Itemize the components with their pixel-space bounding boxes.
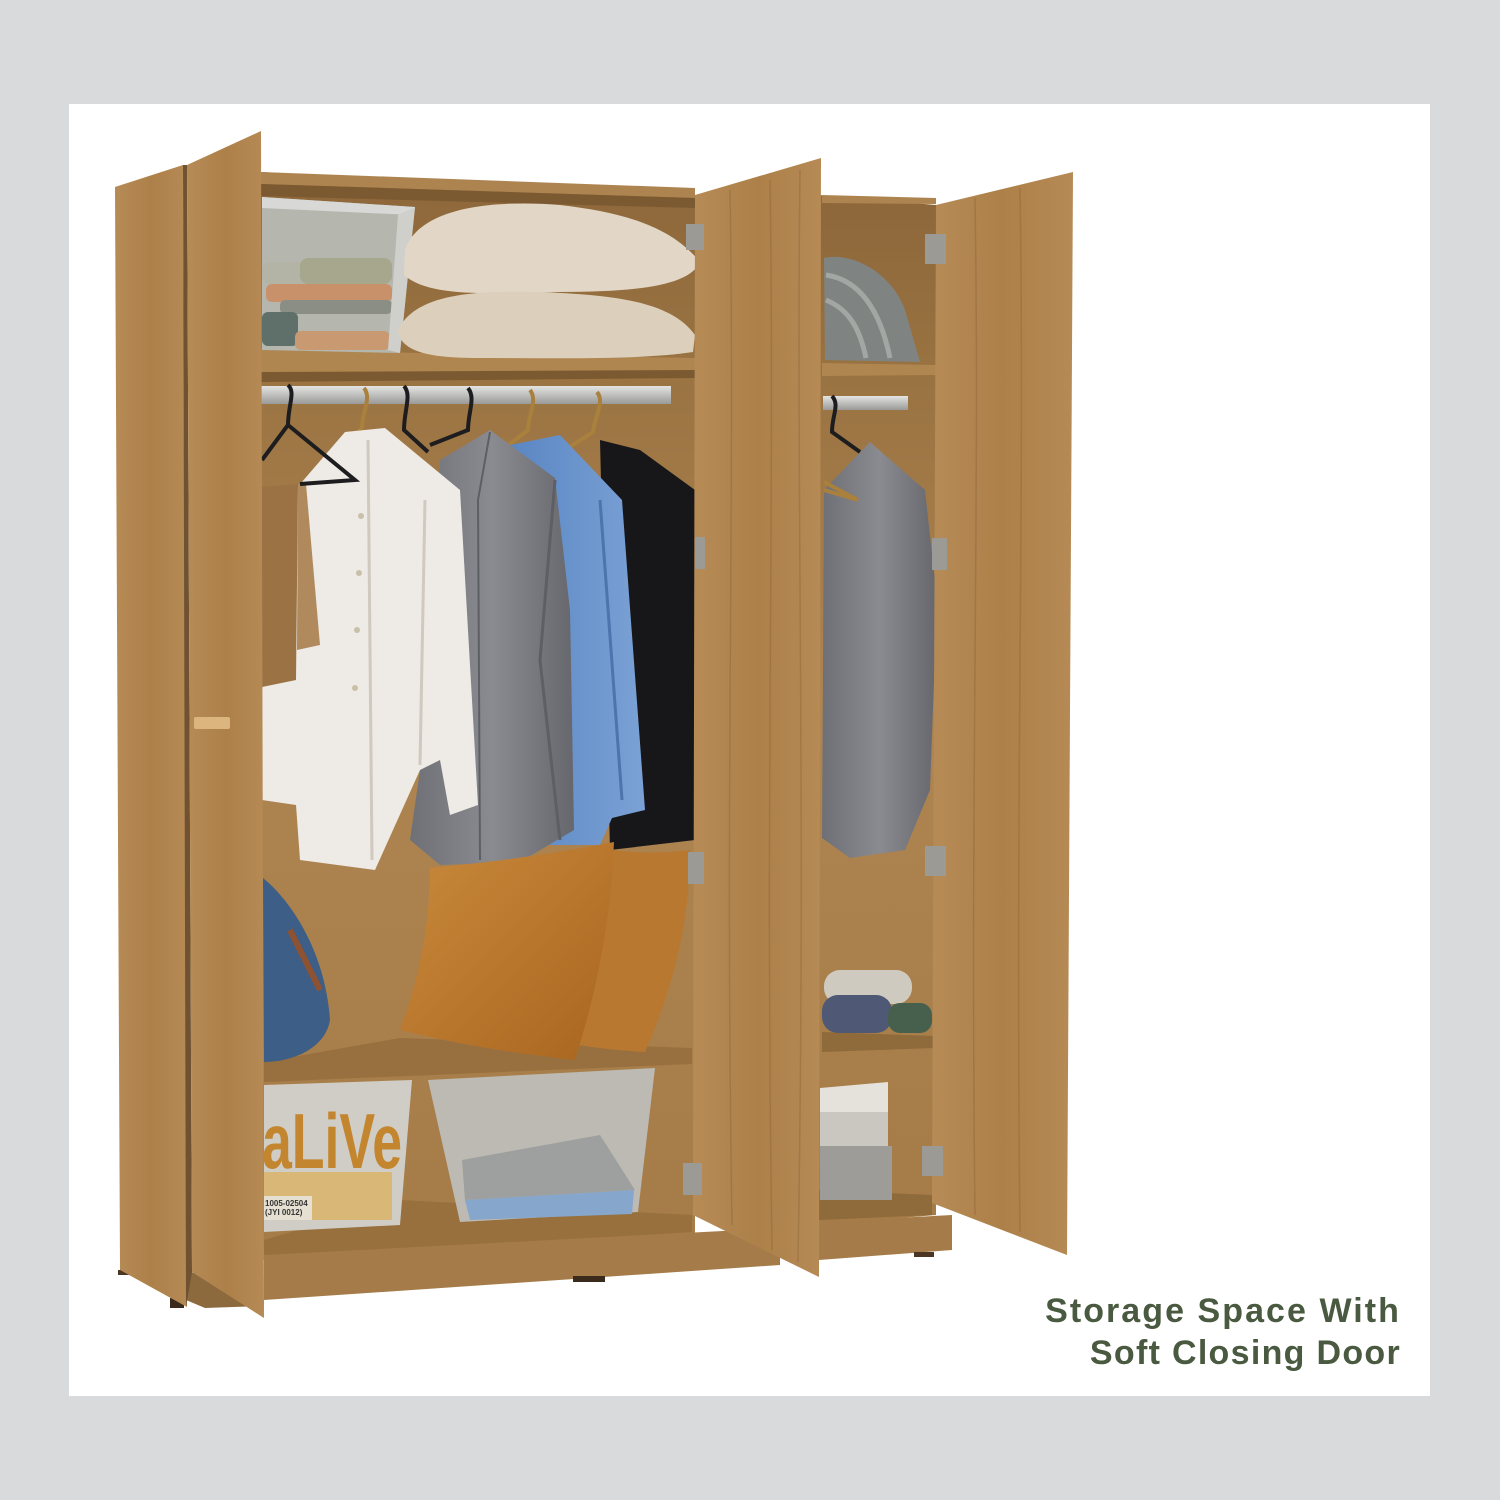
blue shirt [510,435,645,845]
pillows [398,203,700,358]
rail right [823,396,908,410]
stacked boxes [820,1082,892,1200]
lower left box: 1005-02504 [265,1199,308,1208]
caption [1045,1292,1401,1372]
folded clothes [822,970,932,1033]
black shirt [600,440,695,850]
top left storage box [262,197,415,353]
right hanger [824,482,858,500]
lower left box: (JYI 0012) [265,1208,303,1217]
lower left box: aLiVe [262,1097,402,1185]
wardrobe carcass [118,172,952,1308]
backpack [263,878,330,1062]
left door [187,131,264,1318]
white shirt [262,428,478,870]
lower left box [262,1080,412,1232]
left side panel [115,165,192,1307]
left door handle [194,717,230,729]
rail left [261,386,671,404]
door hinges [683,224,947,1195]
hanging towel [262,484,320,687]
back hangers [342,386,860,452]
lower middle box [428,1068,655,1222]
middle door [693,158,821,1277]
panel: white product card [69,104,1430,1396]
grey shirt [410,430,574,865]
right shelf blanket [824,257,920,362]
caption: Soft Closing Door [1090,1334,1401,1372]
front hanger [262,385,355,484]
right door [932,172,1073,1255]
cushions [400,842,690,1060]
caption: Storage Space With [1045,1292,1401,1330]
right cabinet shirt [822,442,937,858]
